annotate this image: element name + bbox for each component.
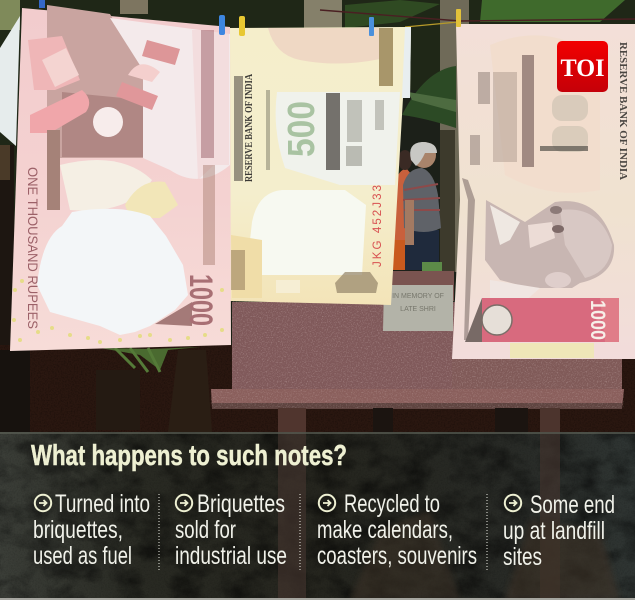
item 3: recycled products [317, 490, 477, 570]
serial number: JKG 452J33 [372, 185, 384, 267]
printed satellite and farming scene [47, 5, 143, 158]
orange band lower-left [231, 235, 262, 298]
pastel ornament [60, 160, 152, 211]
memorial plaque: IN MEMORY OF [392, 293, 444, 300]
banknote: 500 rupees, centre [228, 27, 411, 305]
heading: What happens to such notes? [31, 440, 347, 472]
item 4: landfill: up at landfill [503, 517, 605, 545]
watermark window [37, 209, 188, 335]
item 4: landfill: sites [503, 543, 542, 571]
item 2: sold for industrial use: Briquettes [197, 490, 285, 518]
memorial plaque [383, 285, 453, 331]
large 1000 numeral: 1000 [183, 274, 219, 326]
item 2: sold for industrial use: sold for [175, 516, 236, 544]
corner ornament [155, 302, 192, 326]
TOI logo [557, 41, 608, 92]
item 1: briquettes as fuel: briquettes, [33, 516, 123, 544]
serial seal [482, 305, 512, 335]
banknote: 1000 rupees front with portrait, right [452, 24, 635, 359]
item 3: recycled products: Recycled to [344, 490, 440, 518]
icon: arrow in circle [176, 495, 192, 511]
item 4: landfill [503, 491, 615, 571]
side border ornament [462, 178, 475, 340]
icon: arrow in circle [319, 495, 335, 511]
engraved centre rosette [490, 35, 600, 193]
item 1: briquettes as fuel: used as fuel [33, 542, 132, 570]
icon: arrow in circle [35, 495, 51, 511]
item 1: briquettes as fuel [33, 490, 150, 570]
granite bench [211, 271, 624, 432]
devanagari band rendered as photographic texture [201, 30, 214, 158]
item 2: sold for industrial use [175, 490, 287, 570]
denomination in pale green: 500 [281, 101, 323, 157]
clothesline [320, 10, 635, 27]
vertical bank name: RESERVE BANK OF INDIA [244, 74, 255, 182]
watermark window [249, 190, 366, 275]
icon: arrow in circle [505, 495, 521, 511]
portrait strip at top of 500 note [268, 28, 385, 64]
vertical bank name: RESERVE BANK OF INDIA [617, 42, 628, 180]
white 1000 numeral: 1000 [586, 300, 609, 340]
white cloth flap at left edge [0, 16, 20, 146]
yellow dot row [12, 279, 224, 344]
item 2: sold for industrial use: industrial use [175, 542, 287, 570]
pedestrians behind the notes [392, 142, 442, 271]
devanagari band rendered as photographic texture [522, 55, 534, 167]
gandhi portrait [485, 200, 614, 310]
TOI logo: TOI [560, 55, 604, 82]
item 3: recycled products: make calendars, [317, 516, 453, 544]
denomination text: ONE THOUSAND RUPEES [25, 167, 41, 329]
memorial plaque: LATE SHRI [400, 306, 436, 313]
red denomination strip [482, 298, 619, 342]
item 3: recycled products: coasters, souvenirs [317, 542, 477, 570]
caption panel backdrop [0, 432, 635, 600]
banknote: 1000 rupees reverse, left [10, 5, 231, 351]
item 1: briquettes as fuel: Turned into [55, 490, 150, 518]
ashoka emblem [335, 272, 378, 293]
icon: pegs on clothesline [39, 0, 461, 36]
security pattern cream panel [276, 92, 400, 185]
pale numerals [552, 95, 588, 152]
